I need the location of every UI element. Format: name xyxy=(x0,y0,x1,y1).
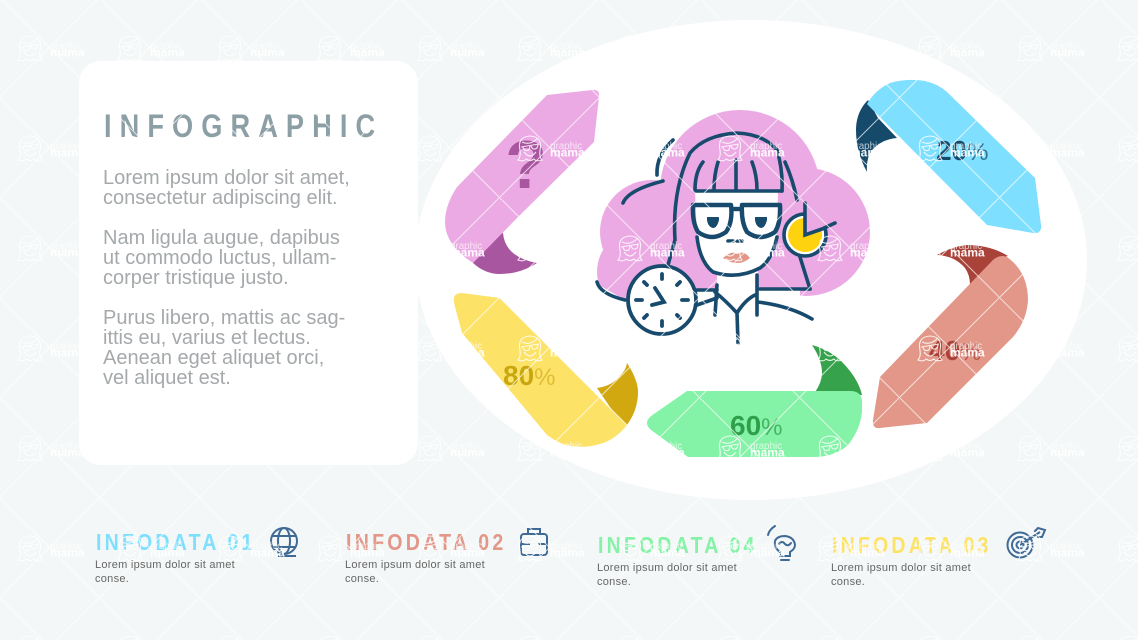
value: 80%: 80% xyxy=(503,360,556,391)
arrow: pink question xyxy=(445,90,599,274)
panel: intro card xyxy=(79,61,418,465)
infodata descriptions: Lorem ipsum dolor sit amet xyxy=(597,562,737,574)
heading: INFODATA 02 xyxy=(346,530,503,555)
icon: globe xyxy=(271,528,297,556)
icon: target xyxy=(1008,528,1045,558)
panel body text: Nam ligula augue, dapibus xyxy=(103,227,340,249)
infodata descriptions: conse. xyxy=(95,573,129,585)
panel body text: Aenean eget aliquet orci, xyxy=(103,347,324,369)
title: INFOGRAPHIC xyxy=(104,109,375,145)
infodata 03 xyxy=(832,528,1045,558)
infodata descriptions: conse. xyxy=(597,576,631,588)
infodata descriptions: Lorem ipsum dolor sit amet xyxy=(831,562,971,574)
panel body text: ittis eu, varius et lectus. xyxy=(103,327,311,349)
infodata 01 xyxy=(96,528,297,556)
infodata descriptions: conse. xyxy=(345,573,379,585)
arrow: yellow 80% xyxy=(454,293,638,447)
woman line art xyxy=(597,133,812,343)
value: 20%: 20% xyxy=(936,135,988,166)
heading: INFODATA 01 xyxy=(96,530,253,555)
lips xyxy=(723,253,750,263)
icon: question mark: ? xyxy=(505,127,547,203)
icon: clock xyxy=(628,266,696,334)
eyes xyxy=(707,217,767,228)
infodata descriptions: conse. xyxy=(831,576,865,588)
panel body text: Lorem ipsum dolor sit amet, xyxy=(103,167,350,189)
arrow: green 60% xyxy=(647,345,862,457)
icon: briefcase xyxy=(521,529,547,555)
infodata 04 xyxy=(598,526,795,560)
panel body text: consectetur adipiscing elit. xyxy=(103,187,338,209)
icon: light bulb xyxy=(768,526,795,560)
panel body text xyxy=(103,167,350,389)
value: 60%: 60% xyxy=(730,410,782,441)
panel body text: corper tristique justo. xyxy=(103,267,289,289)
value: 40%: 40% xyxy=(929,335,982,366)
heading: INFODATA 03 xyxy=(832,533,989,558)
central illustration: woman in cloud xyxy=(597,110,870,343)
arrow: salmon 40% xyxy=(873,245,1028,428)
panel body text: Purus libero, mattis ac sag- xyxy=(103,307,345,329)
glasses xyxy=(693,205,780,237)
infodata descriptions: Lorem ipsum dolor sit amet xyxy=(345,559,485,571)
white ellipse backdrop xyxy=(415,20,1087,500)
panel body text: vel aliquet est. xyxy=(103,367,231,389)
face and neck xyxy=(695,191,800,330)
infodata descriptions: Lorem ipsum dolor sit amet xyxy=(95,559,235,571)
infodata descriptions xyxy=(95,559,971,588)
heading: INFODATA 04 xyxy=(598,533,755,558)
cloud xyxy=(597,110,870,315)
icon: pie chart xyxy=(784,203,835,256)
infodata 02 xyxy=(346,529,547,555)
panel body text: ut commodo luctus, ullam- xyxy=(103,247,336,269)
arrow: blue 20% xyxy=(856,80,1041,233)
